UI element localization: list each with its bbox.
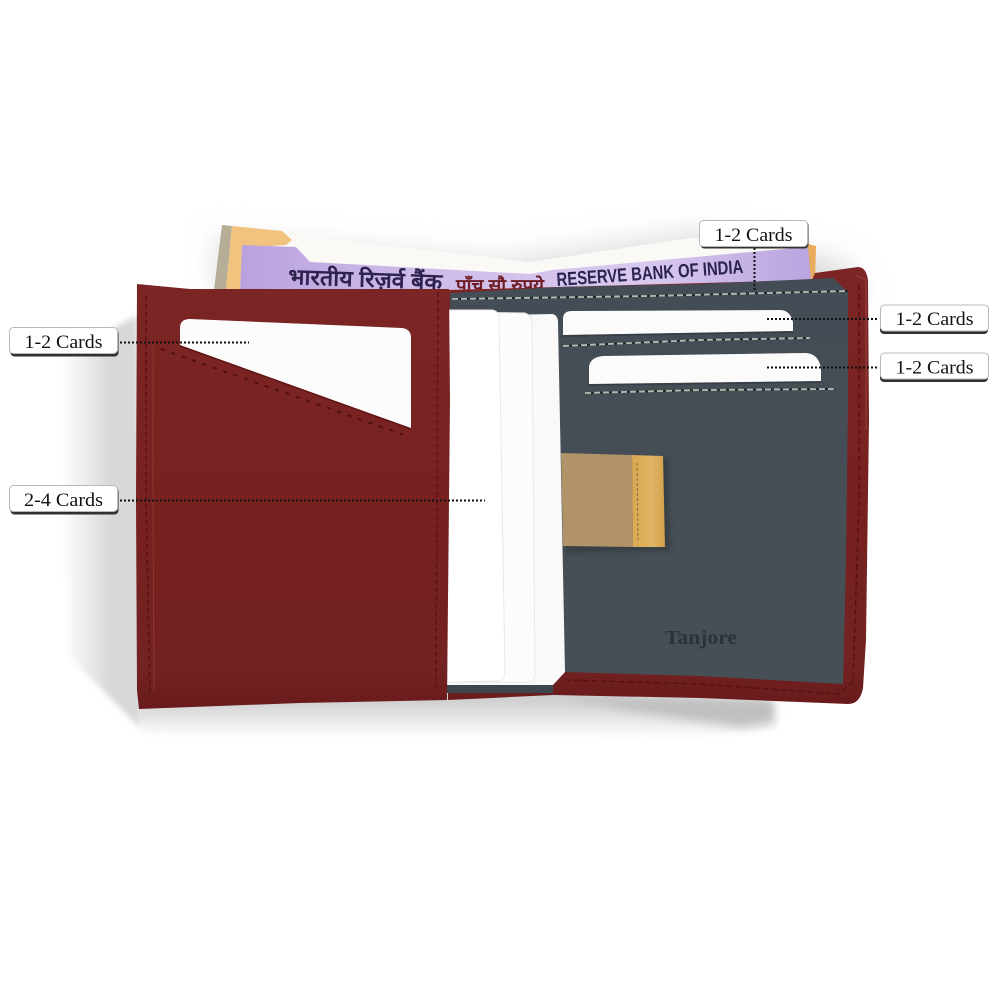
label: 2-4 cards: 2-4 Cards	[24, 490, 103, 511]
label: 1-2 cards lower right	[880, 353, 988, 382]
note security strip and orange print	[214, 225, 232, 290]
Hindi denomination text: पाँच सौ रुपये	[455, 275, 545, 295]
wallet drop shadow	[58, 232, 865, 738]
label: 1-2 cards left: 1-2 Cards	[24, 332, 102, 353]
flap seam highlight	[153, 345, 154, 690]
banknote	[214, 225, 816, 295]
Hindi bank name: भारतीय रिज़र्व बैंक	[288, 263, 444, 294]
note purple band	[240, 245, 812, 292]
leader lines	[120, 248, 879, 500]
middle card	[447, 312, 535, 682]
suede strip	[561, 453, 633, 547]
lower grey edge	[447, 683, 553, 693]
label: 1-2 cards top: 1-2 Cards	[714, 225, 792, 246]
label: 2-4 cards	[10, 486, 118, 514]
back card	[447, 314, 565, 685]
right wallet cover	[448, 267, 869, 704]
English bank name: RESERVE BANK OF INDIA	[556, 257, 744, 291]
card stack	[447, 310, 565, 693]
left wallet flap	[136, 284, 450, 709]
lower pocket card	[589, 353, 821, 384]
label: 1-2 cards upper right	[880, 305, 988, 334]
note paper	[215, 225, 815, 295]
upper pocket card	[563, 310, 793, 335]
yellow leather end	[632, 455, 665, 547]
pocket edge shadows	[563, 332, 821, 385]
cover highlight	[855, 275, 866, 430]
front card	[447, 310, 505, 682]
pocket card	[180, 319, 411, 428]
pocket stitching	[161, 349, 407, 436]
tan elastic tab	[561, 453, 670, 553]
label: 1-2 cards lower right: 1-2 Cards	[896, 358, 974, 378]
label: 1-2 cards upper right: 1-2 Cards	[896, 309, 974, 330]
upper pocket stitching	[563, 338, 810, 346]
right cover stitching	[566, 285, 859, 694]
label: 1-2 cards left	[10, 328, 118, 356]
lower pocket stitching	[585, 389, 835, 393]
embossed brand: Tanjore	[665, 627, 737, 649]
flap stitching	[146, 292, 438, 695]
top stitching	[452, 291, 848, 299]
grey inner panel	[450, 278, 848, 690]
label: 1-2 cards top	[700, 220, 808, 248]
pocket edge	[180, 346, 411, 429]
